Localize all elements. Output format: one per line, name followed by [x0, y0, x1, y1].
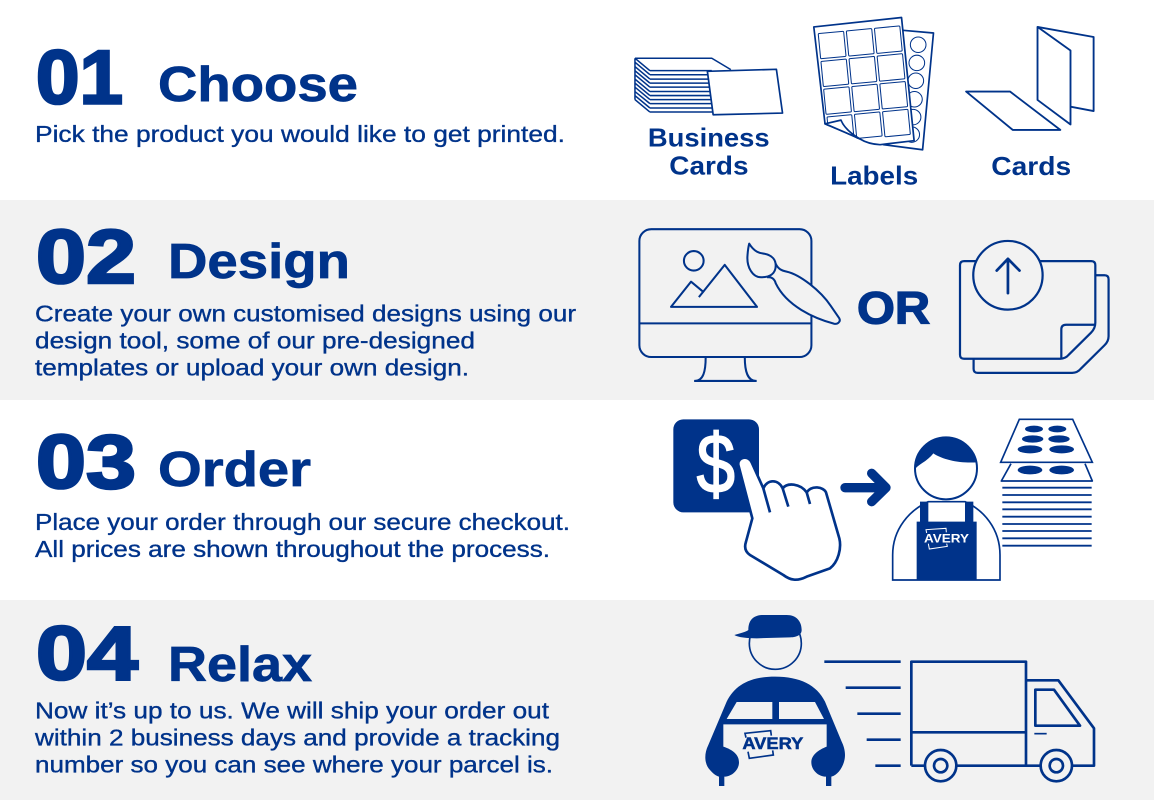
speed lines	[824, 662, 901, 766]
text: relax description: number so you can see where your parcel is.	[35, 752, 553, 778]
label: cards under business: Cards	[669, 150, 749, 180]
icon: stack of printed label sheets	[1001, 419, 1092, 546]
icon: delivery truck	[911, 662, 1094, 781]
step number 01: 01	[36, 36, 123, 120]
icon: courier carrying parcel: AVERY	[742, 734, 803, 753]
text: design description	[35, 300, 576, 380]
panel: 02 design	[0, 200, 1154, 400]
step number 02: 02	[36, 215, 136, 300]
order icons	[673, 417, 1092, 580]
heading: order: Order	[158, 442, 311, 497]
label: cards: Cards	[991, 151, 1071, 181]
icon: label sheets	[814, 17, 933, 150]
icon: upload document	[960, 241, 1109, 373]
heading: choose: Choose	[158, 57, 358, 112]
arrow	[845, 473, 886, 502]
icon: monitor with paintbrush	[639, 229, 840, 381]
design icons	[639, 229, 1109, 381]
product icons	[635, 17, 1094, 190]
text: design description: templates or upload your own design.	[35, 354, 469, 380]
label: labels: Labels	[830, 161, 918, 190]
icon: business cards	[635, 58, 783, 115]
step number 03: 03	[36, 420, 136, 505]
panel: 01 choose	[0, 0, 1154, 200]
heading: relax: Relax	[168, 637, 313, 692]
text: design description: Create your own customised designs using our	[35, 300, 576, 326]
heading: design: Design	[168, 234, 350, 289]
icon: courier carrying parcel	[705, 615, 845, 786]
text: order description: Place your order through our secure checkout.	[35, 509, 570, 535]
text: relax description: within 2 business days and provide a tracking	[34, 724, 560, 750]
step number 04: 04	[36, 612, 138, 696]
text: design description: design tool, some of our pre-designed	[35, 328, 475, 354]
icon: print worker with apron	[893, 437, 1000, 580]
text: relax description: Now it’s up to us. We will ship your order out	[35, 698, 550, 724]
panel: 03 order	[0, 400, 1154, 600]
text: choose description: Pick the product you would like to get printed.	[35, 121, 565, 147]
icon: print worker with apron: AVERY	[924, 531, 970, 545]
panel: 04 relax	[0, 600, 1154, 800]
label: business cards: Business	[648, 123, 770, 152]
delivery icons	[705, 615, 1094, 786]
text: relax description	[34, 698, 560, 778]
icon: dollar button and pointing hand	[673, 417, 840, 580]
text: or: OR	[857, 282, 930, 333]
text: order description	[35, 509, 570, 562]
icon: folded cards	[966, 27, 1094, 130]
text: order description: All prices are shown throughout the process.	[35, 536, 550, 562]
icon: dollar button and pointing hand: $	[697, 417, 735, 510]
